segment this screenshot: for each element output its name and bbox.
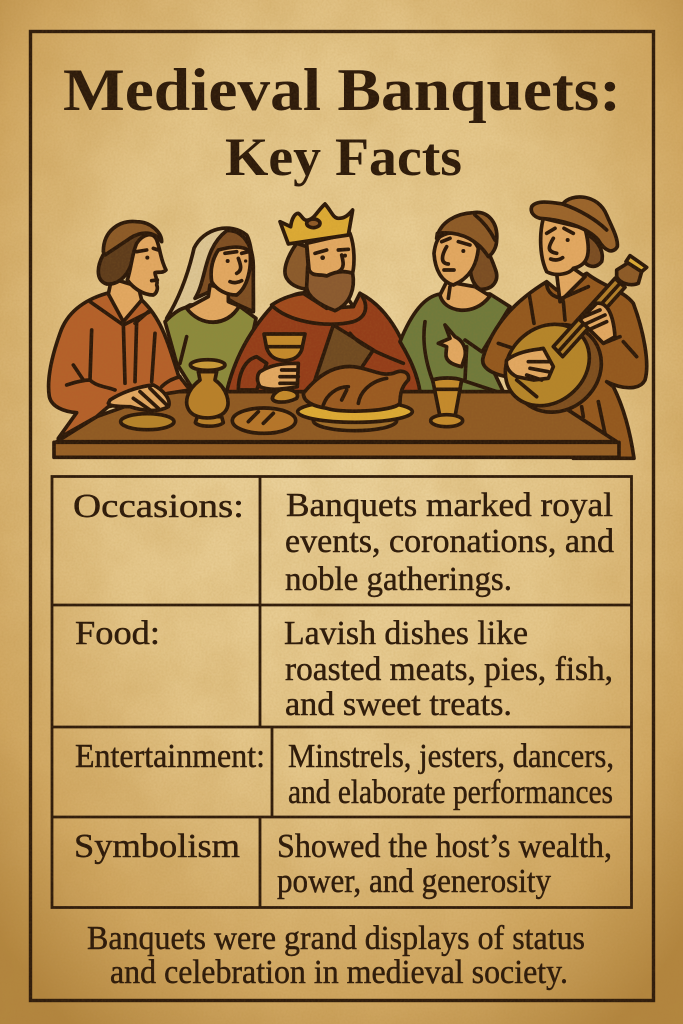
roast turkey on platter (298, 367, 412, 431)
title (63, 57, 621, 187)
footer note: Banquets were grand displays of status (87, 920, 585, 957)
row: occasions (73, 487, 614, 598)
figure: crowned king (227, 204, 422, 392)
lute and playing hands (489, 256, 647, 430)
row: occasions: Occasions: (73, 488, 244, 525)
row: symbolism: Showed the host’s wealth, (277, 828, 612, 865)
figure: musician (483, 197, 647, 458)
plate (121, 414, 174, 430)
row: food: and sweet treats. (285, 686, 512, 723)
bread loaf (232, 408, 296, 433)
figure: person in green (400, 212, 510, 392)
banquet table (54, 392, 619, 457)
row: food: roasted meats, pies, fish, (285, 651, 613, 688)
illustration: banquet scene (49, 197, 647, 458)
figure: woman in veil (165, 228, 256, 393)
jug (187, 360, 228, 426)
goblet base (272, 389, 298, 402)
row: occasions: Banquets marked royal (286, 487, 613, 524)
row: food: Lavish dishes like (284, 615, 528, 652)
row: entertainment: and elaborate performances (288, 774, 613, 811)
row: entertainment (75, 738, 614, 811)
row: food: Food: (75, 615, 160, 652)
facts table (52, 476, 632, 908)
row: entertainment: Entertainment: (75, 738, 265, 775)
footer note: and celebration in medieval society. (110, 954, 568, 991)
footer note (87, 920, 585, 991)
row: entertainment: Minstrels, jesters, dancers, (288, 738, 614, 775)
drinking glass (431, 378, 463, 427)
table grid (52, 476, 632, 908)
figure: left man in orange robe (49, 221, 190, 438)
row: symbolism: Symbolism (74, 828, 240, 865)
row: food (75, 615, 613, 723)
row: symbolism (74, 828, 612, 900)
subtitle: Key Facts (225, 127, 462, 187)
row: occasions: noble gatherings. (285, 561, 512, 598)
row: symbolism: power, and generosity (277, 863, 551, 900)
row: occasions: events, coronations, and (285, 523, 614, 560)
title: Medieval Banquets: (63, 57, 621, 123)
